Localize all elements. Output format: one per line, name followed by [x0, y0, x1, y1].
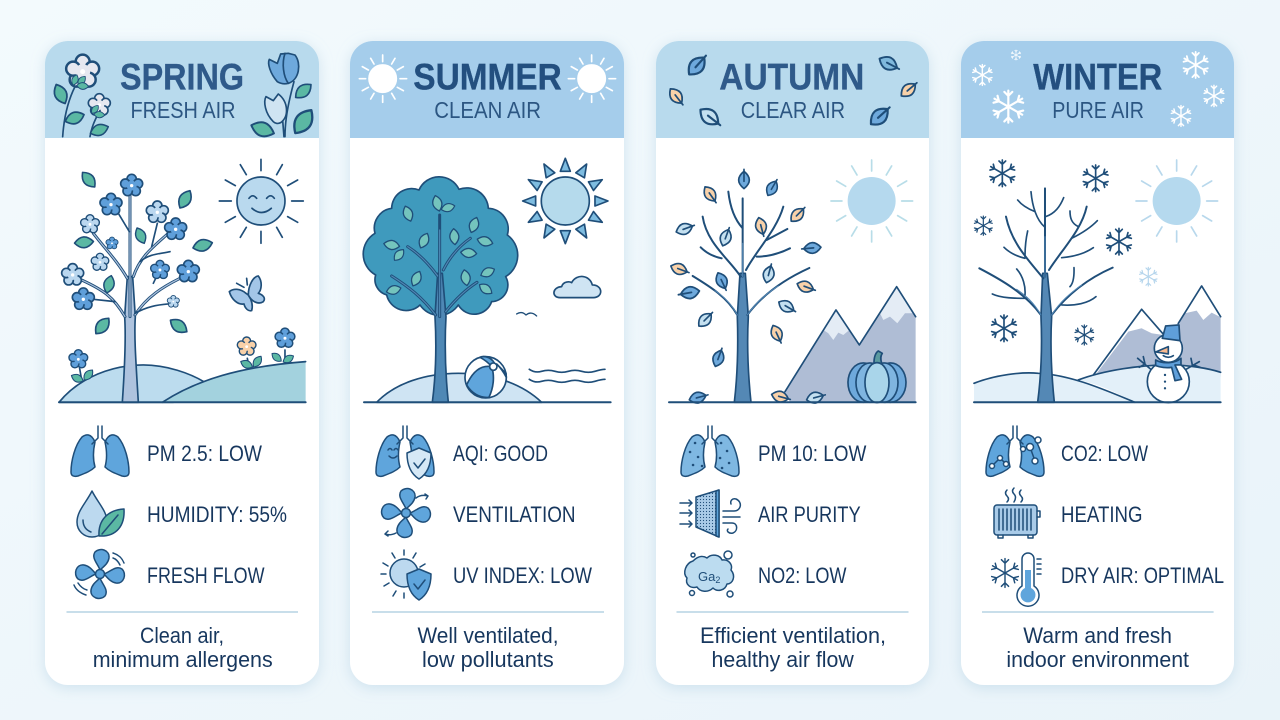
bare tree — [979, 188, 1113, 402]
smiling sun — [219, 159, 303, 243]
pumpkin — [848, 351, 906, 403]
icon: lungs with molecules — [986, 426, 1044, 476]
gas label: 2 — [715, 575, 720, 585]
beach ball — [465, 357, 506, 398]
ground line — [669, 399, 916, 405]
caption: Warm and fresh — [1023, 623, 1172, 648]
tree — [693, 192, 809, 402]
ground line — [974, 399, 1221, 405]
bird — [517, 313, 537, 316]
metric: ventilation — [382, 489, 576, 537]
caption: Clean air, — [140, 623, 224, 648]
icon: header suns — [359, 55, 616, 102]
label: HUMIDITY: 55% — [147, 502, 287, 527]
icon: lungs with shield — [376, 426, 434, 479]
icon: header flowers — [51, 53, 318, 140]
subtitle: FRESH AIR — [130, 97, 236, 123]
hills — [59, 362, 306, 402]
icon: air filter — [680, 490, 740, 537]
metric: humidity — [77, 491, 287, 537]
card body — [350, 41, 624, 685]
label: AQI: GOOD — [453, 441, 548, 466]
caption: Well ventilated, — [418, 623, 558, 648]
header band — [350, 41, 624, 138]
title: WINTER — [1033, 56, 1162, 98]
label: PM 10: LOW — [758, 441, 867, 466]
metric: CO2 — [986, 426, 1148, 476]
icon: header leaves — [666, 51, 920, 131]
butterfly — [229, 276, 264, 311]
panel: summer — [350, 41, 624, 685]
panel: spring — [45, 41, 319, 685]
title: AUTUMN — [719, 56, 864, 98]
winter scene — [974, 160, 1221, 403]
card body — [656, 41, 929, 685]
icon: fan — [74, 550, 124, 598]
label: NO2: LOW — [758, 563, 847, 588]
label: FRESH FLOW — [147, 563, 265, 588]
waves — [529, 369, 605, 382]
icon: gas cloud — [685, 551, 734, 597]
hill — [377, 373, 542, 402]
snowman — [1138, 325, 1200, 403]
caption: Efficient ventilation, — [700, 623, 886, 648]
label: HEATING — [1061, 502, 1142, 527]
panel: autumn — [656, 41, 929, 685]
label: PM 2.5: LOW — [147, 441, 262, 466]
label: CO2: LOW — [1061, 441, 1148, 466]
icon: lungs with particles — [681, 426, 739, 476]
metric: NO2 — [685, 551, 847, 597]
title: SUMMER — [413, 56, 562, 98]
subtitle: PURE AIR — [1052, 97, 1144, 123]
spiky sun — [523, 158, 608, 244]
caption: minimum allergens — [93, 647, 273, 672]
metric: dry air — [991, 553, 1224, 606]
metric: heating — [994, 488, 1142, 538]
ground line — [364, 399, 611, 405]
blossom tree — [62, 169, 214, 402]
title: SPRING — [120, 56, 244, 98]
ground flowers — [69, 328, 295, 384]
ground line — [59, 399, 306, 405]
icon: snowflake and thermometer — [991, 553, 1041, 606]
mountains — [1093, 286, 1221, 377]
label: VENTILATION — [453, 502, 576, 527]
caption — [93, 623, 273, 672]
label: UV INDEX: LOW — [453, 563, 592, 588]
summer scene — [363, 158, 611, 402]
metric: PM 2.5 — [71, 426, 262, 476]
spring scene — [59, 159, 306, 402]
round tree — [363, 177, 518, 402]
caption: low pollutants — [422, 647, 554, 672]
panel: winter — [961, 41, 1234, 685]
caption — [418, 623, 558, 672]
autumn scene — [669, 160, 916, 405]
subtitle: CLEAN AIR — [434, 97, 541, 123]
header band — [656, 41, 929, 138]
falling leaves — [669, 169, 827, 405]
icon: sun with shield — [381, 550, 431, 600]
subtitle: CLEAR AIR — [741, 97, 845, 123]
falling snowflakes — [974, 160, 1158, 345]
metric: air purity — [680, 490, 861, 537]
caption: indoor environment — [1006, 647, 1189, 672]
icon: lungs — [71, 426, 129, 476]
metric: AQI — [376, 426, 548, 479]
metric: PM 10 — [681, 426, 867, 476]
caption: healthy air flow — [712, 647, 854, 672]
card body — [45, 41, 319, 685]
header band — [961, 41, 1234, 138]
metric: fresh flow — [74, 550, 265, 598]
icon: header snowflakes — [972, 50, 1225, 126]
pale sun — [1136, 160, 1218, 242]
snow hills — [974, 365, 1221, 402]
icon: radiator — [994, 488, 1040, 538]
mountains — [785, 287, 916, 402]
gas label: Ga — [698, 569, 715, 584]
caption — [1006, 623, 1189, 672]
label: DRY AIR: OPTIMAL — [1061, 563, 1224, 588]
metric: UV index — [381, 550, 592, 600]
cloud — [554, 276, 601, 298]
icon: fan with arrows — [382, 489, 430, 537]
caption — [700, 623, 886, 672]
label: AIR PURITY — [758, 502, 861, 527]
card body — [961, 41, 1234, 685]
icon: drop and leaf — [77, 491, 124, 537]
pale sun — [831, 160, 913, 242]
header band — [45, 41, 319, 138]
